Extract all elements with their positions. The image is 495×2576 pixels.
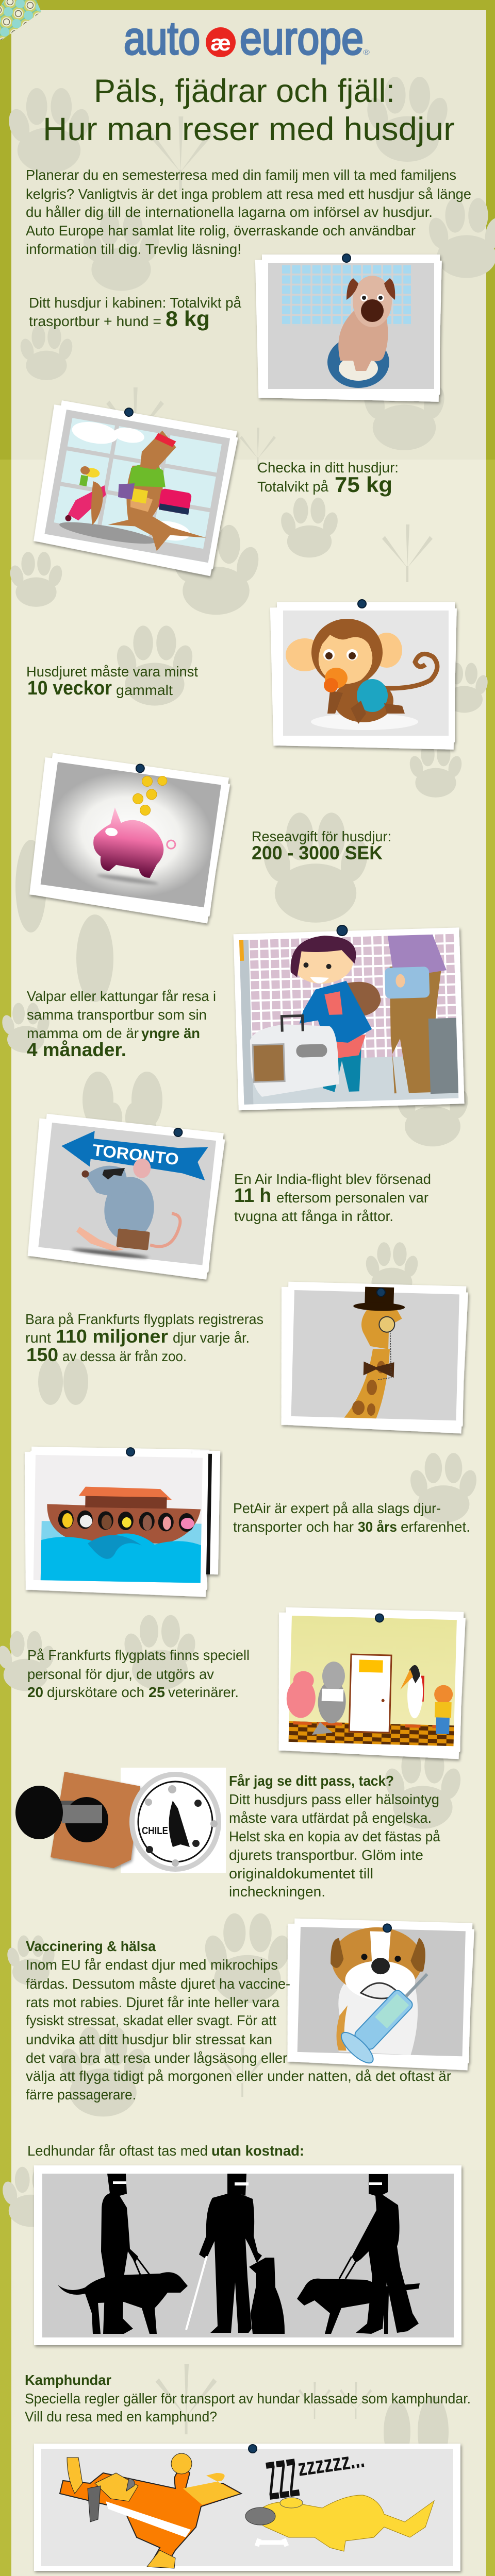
stat: PetAir experience: transporter och har <box>233 1519 354 1535</box>
heading: guide dogs <box>27 2143 304 2159</box>
stat: Frankfurt airport animals: djur varje år. <box>173 1330 250 1346</box>
stat: check-in weight: Checka in ditt husdjur: <box>257 460 399 476</box>
photo: cartoon dogs <box>34 2444 460 2571</box>
logo: auto europe: europe <box>240 13 364 64</box>
photo: rat with Toronto sign <box>24 1113 226 1280</box>
intro text: Auto Europe har samlat lite rolig, överraskande och användbar <box>26 223 416 239</box>
photo: pug on scale <box>255 254 442 402</box>
title <box>43 73 455 147</box>
heading: guide dogs: utan kostnad: <box>211 2143 304 2159</box>
coins <box>131 772 168 818</box>
silhouette: man with cane and sitting dog <box>199 2174 262 2333</box>
stat: Air India flight: tvugna att fånga in råttor. <box>234 1208 393 1224</box>
logo: auto europe: ® <box>363 48 370 56</box>
pet carrier <box>250 1023 339 1097</box>
karate dog <box>60 2453 241 2568</box>
text: passport: måste vara utfärdat på engelska. <box>229 1810 432 1826</box>
stat: check-in weight: 75 kg <box>335 472 392 497</box>
stat: Frankfurt airport animals <box>25 1311 263 1365</box>
stat: minimum age <box>26 664 198 699</box>
stat: puppies and kittens: samma transportbur som sin <box>27 1007 207 1023</box>
intro text <box>26 167 471 257</box>
stat: PetAir experience: 30 års <box>358 1519 397 1535</box>
stat: travel fee <box>252 828 391 863</box>
text: vaccination and health: undvika att ditt husdjur blir stressat kan <box>26 2031 272 2047</box>
stat: puppies and kittens <box>27 988 216 1060</box>
sleeping text: ZZZ <box>263 2448 302 2512</box>
photo: giraffe with monocle <box>278 1281 468 1434</box>
stat: Frankfurt airport animals: runt <box>25 1330 51 1346</box>
intro text: information till dig. Trevlig läsning! <box>26 241 241 257</box>
text: fighting dogs: Vill du resa med en kamphund? <box>25 2409 217 2425</box>
text: passport: incheckningen. <box>229 1884 325 1900</box>
text: vaccination and health: rats mot rabies. Djuret får inte heller vara <box>26 1994 279 2010</box>
text: passport: Ditt husdjurs pass eller hälsointyg <box>229 1791 439 1807</box>
stat: cabin weight: Ditt husdjur i kabinen: Totalvikt på <box>29 295 241 311</box>
stat: puppies and kittens: mamma om de är <box>27 1025 139 1041</box>
window frame <box>44 410 230 563</box>
adult with bag <box>384 934 450 1094</box>
text: passport <box>229 1773 440 1900</box>
white cane <box>186 2256 207 2330</box>
silhouette: man with dog right <box>352 2174 419 2334</box>
stat: Air India flight: eftersom personalen var <box>276 1190 428 1206</box>
heading: guide dogs: Ledhundar får oftast tas med <box>27 2143 208 2159</box>
text: vaccination and health: färre passagerare. <box>26 2087 136 2103</box>
stat: check-in weight <box>257 460 399 497</box>
stat: Air India flight: 11 h <box>234 1185 271 1207</box>
text: vaccination and health: Vaccinering & hälsa <box>26 1938 156 1954</box>
stat: Air India flight <box>234 1171 431 1224</box>
stat: travel fee: Reseavgift för husdjur: <box>252 828 391 844</box>
stat: minimum age: Husdjuret måste vara minst <box>26 664 198 680</box>
text: vaccination and health: välja att flyga tidigt på morgonen eller under natten, då det oftast är <box>26 2068 451 2084</box>
stat: PetAir experience: PetAir är expert på alla slags djur- <box>233 1500 441 1516</box>
text: passport: djurets transportbur. Glöm inte <box>229 1847 423 1863</box>
text: vaccination and health: fysiskt stressat, skadat eller svagt. För att <box>26 2012 276 2028</box>
stat: Frankfurt airport animals: av dessa är från zoo. <box>62 1348 187 1364</box>
text: passport: originaldokumentet till <box>229 1866 373 1882</box>
intro text: kelgris? Vanligtvis är det inga problem att resa med ett husdjur så länge <box>26 186 471 202</box>
stat: puppies and kittens: Valpar eller kattungar får resa i <box>27 988 216 1004</box>
stamp: wooden stamp and Chile imprint: CHILE <box>142 1825 168 1837</box>
stat: cabin weight <box>29 295 241 331</box>
silhouette: man with dog left <box>101 2174 138 2334</box>
title: Hur man reser med husdjur <box>43 111 455 147</box>
photo: guide dog silhouettes <box>34 2165 461 2345</box>
stat: Frankfurt staff: På Frankfurts flygplats finns speciell <box>27 1647 250 1663</box>
photo: rat with Toronto sign: TORONTO <box>92 1141 180 1168</box>
text: vaccination and health: färdas. Dessutom måste djuret ha vaccine- <box>26 1976 290 1992</box>
text: vaccination and health: Inom EU får endast djur med mikrochips <box>26 1957 278 1973</box>
stat: Frankfurt staff: 20 <box>27 1684 43 1700</box>
text: fighting dogs: Kamphundar <box>25 2372 111 2388</box>
photo: bulldog vet with syringe <box>284 1918 474 2071</box>
stat: cabin weight: trasportbur + hund = <box>29 313 161 329</box>
stamp: wooden stamp and Chile imprint <box>15 1768 226 1873</box>
stat: Frankfurt staff: personal för djur, de utgörs av <box>27 1666 214 1682</box>
stat: minimum age: 10 veckor <box>27 677 112 699</box>
suitcase <box>428 1018 458 1094</box>
logo: auto europe: auto <box>124 13 200 64</box>
photo: child with pet carrier <box>233 922 465 1110</box>
stat: travel fee: 200 - 3000 SEK <box>252 842 383 863</box>
stat: Frankfurt airport animals: Bara på Frankfurts flygplats registreras <box>25 1311 263 1327</box>
stat: puppies and kittens: 4 månader. <box>27 1039 126 1060</box>
stat: Frankfurt staff: veterinärer. <box>168 1684 239 1700</box>
photo: vet waiting room <box>275 1607 466 1759</box>
photo: baby monkey <box>270 600 457 750</box>
stat: check-in weight: Totalvikt på <box>257 479 328 495</box>
stat: cabin weight: 8 kg <box>166 307 210 331</box>
corner tape top-left <box>0 0 41 40</box>
stat: PetAir experience: erfarenhet. <box>401 1519 470 1535</box>
photo: Noah's ark <box>22 1446 220 1597</box>
photo: piggy bank <box>26 751 231 924</box>
text: fighting dogs <box>25 2372 471 2425</box>
text: vaccination and health: det vara bra att resa under lågsäsong eller <box>26 2050 287 2066</box>
sunglasses <box>113 2181 382 2185</box>
stat: PetAir experience <box>233 1500 470 1535</box>
sleeping text: zzzzzz... <box>296 2445 366 2481</box>
text: passport: Helst ska en kopia av det fästas på <box>229 1828 440 1844</box>
stat: Frankfurt airport animals: 110 miljoner <box>56 1326 168 1347</box>
title: Päls, fjädrar och fjäll: <box>94 73 395 109</box>
stat: Frankfurt staff <box>27 1647 250 1700</box>
stat: Air India flight: En Air India-flight blev försenad <box>234 1171 431 1187</box>
stat: Frankfurt airport animals: 150 <box>26 1344 58 1365</box>
text: fighting dogs: Speciella regler gäller för transport av hundar klassade som kamphundar. <box>25 2391 471 2406</box>
stat: Frankfurt staff: 25 <box>148 1684 165 1700</box>
logo: auto europe: æ <box>210 30 231 56</box>
intro text: du håller dig till de internationella lagarna om införsel av husdjur. <box>26 204 433 220</box>
stat: minimum age: gammalt <box>116 682 173 698</box>
text: vaccination and health <box>26 1938 451 2103</box>
photo: kangaroo with luggage <box>29 395 240 577</box>
text: passport: Får jag se ditt pass, tack? <box>229 1773 394 1789</box>
logo: auto europe <box>124 13 370 64</box>
sleeping dog <box>245 2495 434 2551</box>
stat: puppies and kittens: yngre än <box>141 1025 200 1041</box>
intro text: Planerar du en semesterresa med din familj men vill ta med familjens <box>26 167 456 183</box>
stat: Frankfurt staff: djurskötare och <box>47 1684 144 1700</box>
